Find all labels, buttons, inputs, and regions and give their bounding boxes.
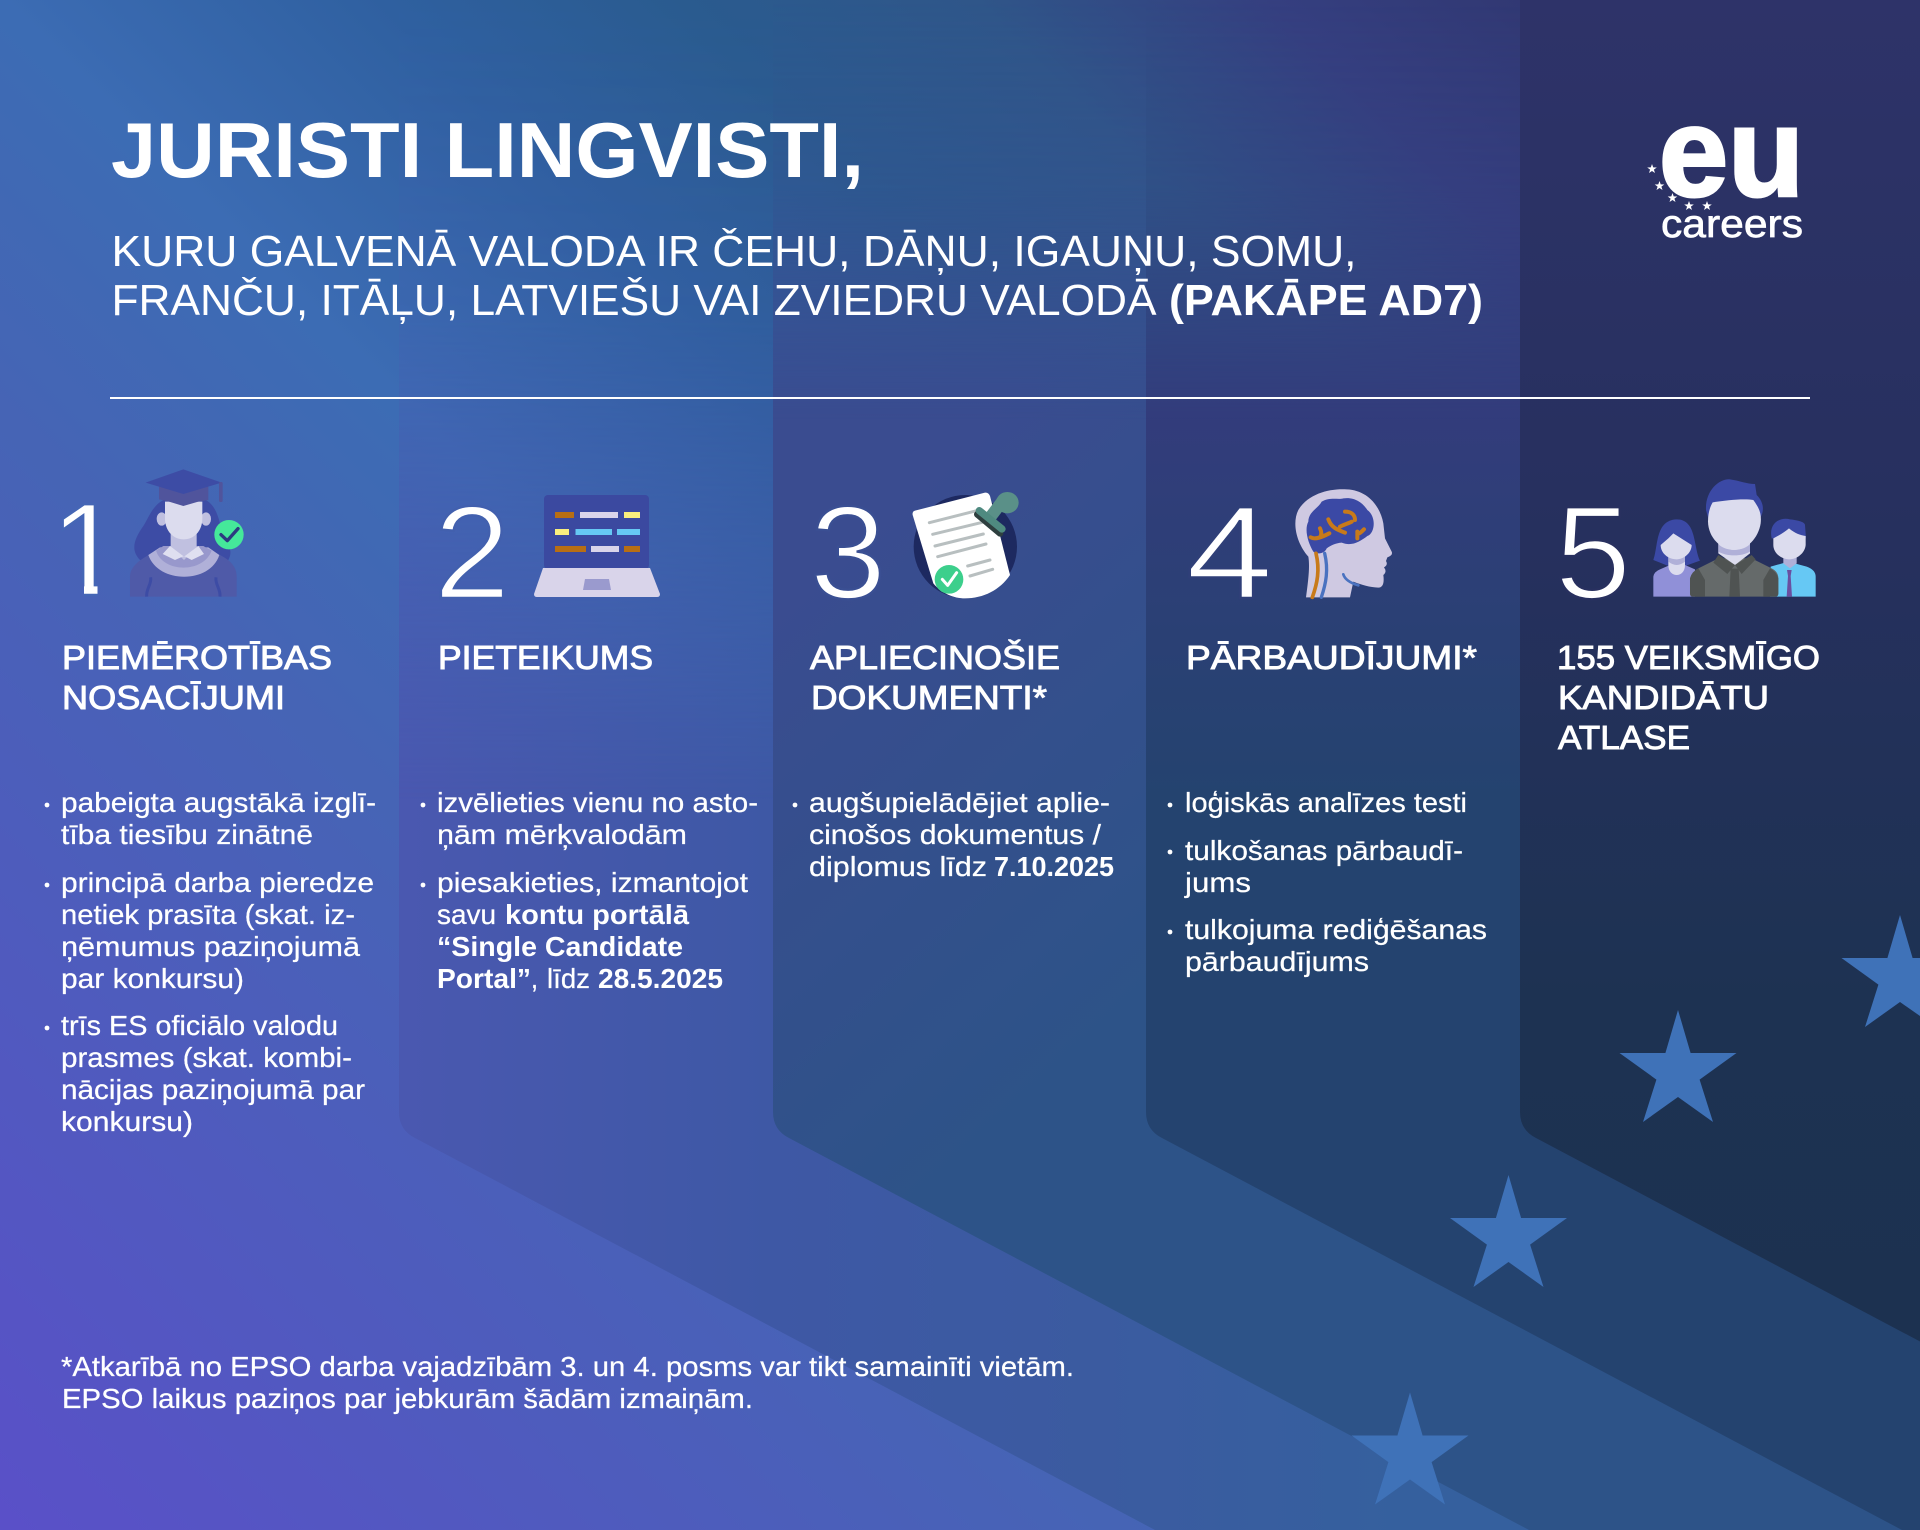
- footnote: EPSO laikus paziņos par jebkurām šādām izmaiņām.: [62, 1383, 753, 1414]
- heading: PIEMĒROTĪBAS: [62, 639, 332, 676]
- bullet list: konkursu): [61, 1106, 193, 1137]
- number 1: 1: [50, 476, 123, 623]
- bullet list: pārbaudījums: [1185, 946, 1369, 977]
- icon: graduate with check: [130, 469, 244, 597]
- subtitle: KURU GALVENĀ VALODA IR ČEHU, DĀŅU, IGAUŅU, SOMU,: [112, 226, 1356, 276]
- heading: ATLASE: [1558, 719, 1690, 756]
- bullet list: “Single Candidate: [437, 931, 683, 962]
- step 3: supporting documents: [793, 479, 1114, 882]
- icon: laptop: [534, 495, 660, 597]
- bullet list: par konkursu): [61, 963, 244, 994]
- heading: [62, 639, 332, 716]
- bullet list: tība tiesību zinātnē: [61, 819, 313, 850]
- heading: KANDIDĀTU: [1558, 679, 1769, 716]
- bullet list: prasmes (skat. kombi-: [61, 1042, 352, 1073]
- bullet list: nācijas paziņojumā par: [61, 1074, 365, 1105]
- bullet list: loģiskās analīzes testi: [1185, 787, 1467, 818]
- bullet list: 28.5.2025: [598, 963, 723, 994]
- footnote: [61, 1351, 1074, 1414]
- heading: [1557, 639, 1820, 756]
- number 2: 2: [434, 479, 510, 626]
- bullet list: līdz: [547, 963, 590, 994]
- heading: NOSACĪJUMI: [62, 679, 285, 716]
- heading: DOKUMENTI*: [811, 679, 1047, 716]
- subtitle: FRANČU, ITĀĻU, LATVIEŠU VAI ZVIEDRU VALODĀ: [112, 275, 1157, 325]
- bullet list: tulkojuma rediģēšanas: [1185, 914, 1487, 945]
- bullet list: [1168, 787, 1487, 977]
- logo: EU careers: careers: [1661, 203, 1803, 246]
- bullet list: Portal”: [437, 963, 531, 994]
- bullet list: cinošos dokumentus /: [809, 819, 1101, 850]
- bullet list: piesakieties, izmantojot: [437, 867, 748, 898]
- bullet list: izvēlieties vienu no asto-: [437, 787, 758, 818]
- step 4: tests: [1168, 479, 1487, 977]
- step 1: eligibility: [45, 469, 376, 1137]
- subtitle: [112, 226, 1483, 325]
- heading: PĀRBAUDĪJUMI*: [1186, 639, 1477, 676]
- heading: [810, 639, 1060, 716]
- step 2: application: [421, 479, 758, 994]
- icon: group of people: [1653, 479, 1816, 597]
- bullet list: tulkošanas pārbaudī-: [1185, 835, 1463, 866]
- bullet list: [793, 787, 1114, 882]
- bullet list: augšupielādējiet aplie-: [809, 787, 1110, 818]
- bullet list: ņēmumus paziņojumā: [61, 931, 360, 962]
- step 5: selected candidates: [1555, 479, 1820, 756]
- bullet list: principā darba pieredze: [61, 867, 374, 898]
- number 4: 4: [1186, 479, 1273, 626]
- heading: 155 VEIKSMĪGO: [1557, 639, 1820, 676]
- decorative EU stars: [1352, 915, 1920, 1504]
- logo: EU careers: eu: [1659, 82, 1804, 223]
- icon: head with brain: [1295, 489, 1392, 597]
- bullet list: kontu portālā: [505, 899, 689, 930]
- divider: [110, 397, 1810, 399]
- bullet list: pabeigta augstākā izglī-: [61, 787, 376, 818]
- heading: APLIECINOŠIE: [810, 639, 1060, 676]
- footnote: *Atkarībā no EPSO darba vajadzībām 3. un 4. posms var tikt samainīti vietām.: [61, 1351, 1074, 1382]
- number 3: 3: [810, 479, 886, 626]
- bullet list: [421, 787, 758, 994]
- heading: PIETEIKUMS: [438, 639, 653, 676]
- bullet list: savu: [437, 899, 496, 930]
- bullet list: diplomus līdz: [809, 851, 987, 882]
- icon: stamped document: [913, 492, 1019, 598]
- bullet list: jums: [1184, 867, 1251, 898]
- number 5: 5: [1555, 479, 1631, 626]
- bullet list: [45, 787, 376, 1137]
- bullet list: ņām mērķvalodām: [437, 819, 687, 850]
- bullet list: 7.10.2025: [994, 851, 1114, 882]
- subtitle: (PAKĀPE AD7): [1169, 276, 1483, 325]
- bullet list: ,: [531, 963, 538, 994]
- bullet list: trīs ES oficiālo valodu: [61, 1010, 338, 1041]
- title: JURISTI LINGVISTI,: [111, 106, 864, 194]
- bullet list: netiek prasīta (skat. iz-: [61, 899, 355, 930]
